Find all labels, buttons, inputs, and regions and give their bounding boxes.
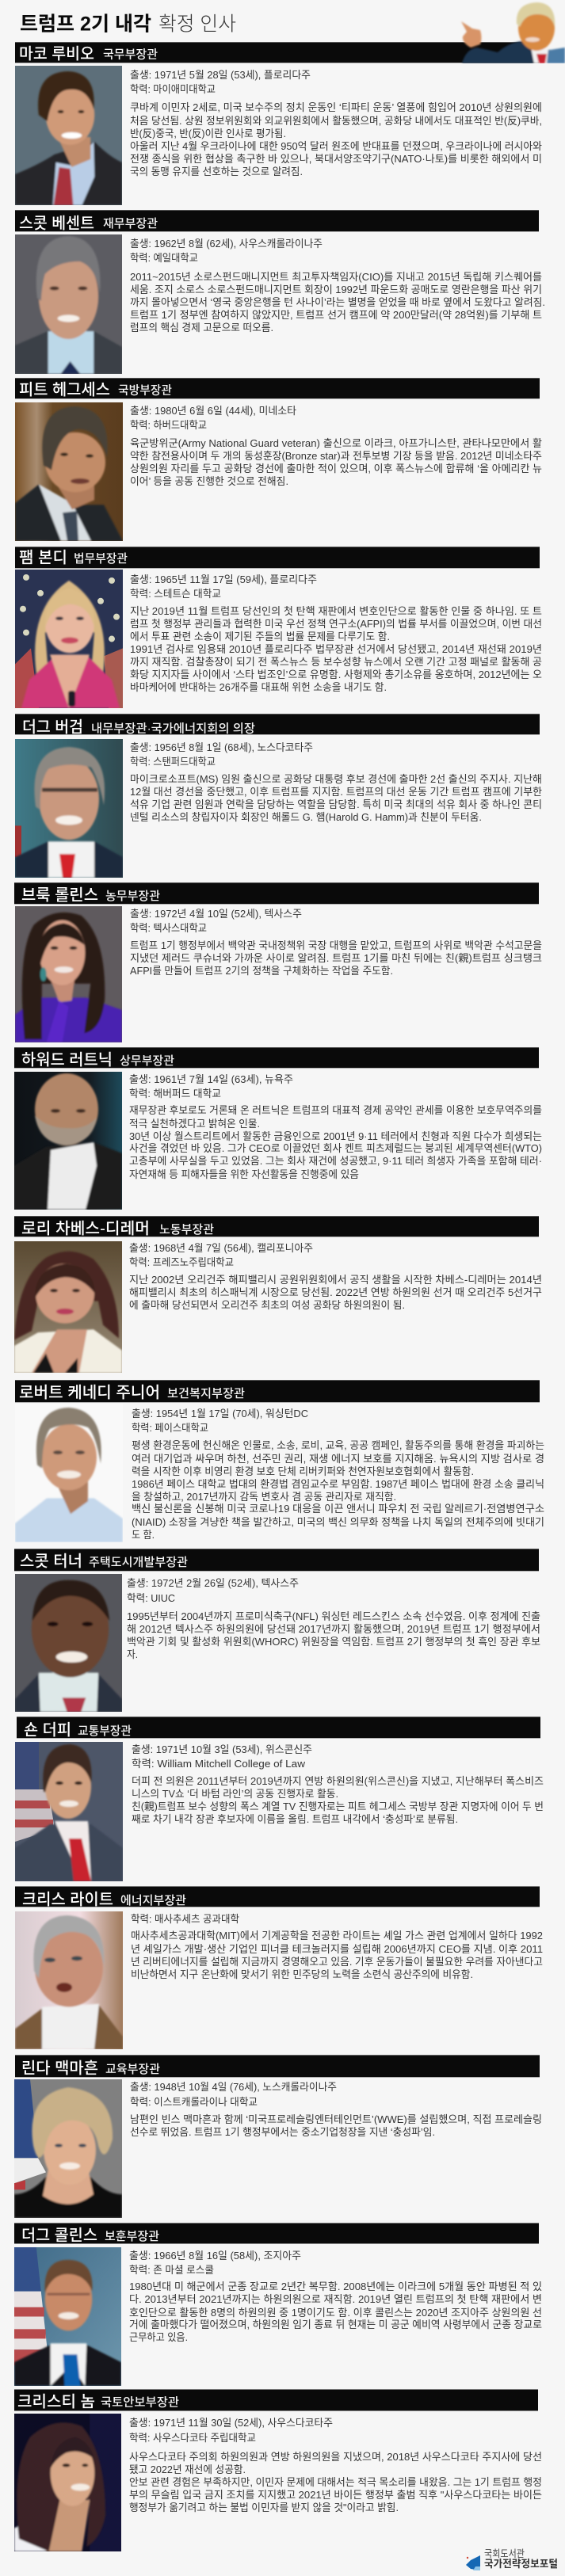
profile text: 하워드 러트닉: 출생: 1961년 7월 14일 (63세), 뉴욕주	[129, 1073, 293, 1085]
profile text: 스콧 베센트: 학력: 예일대학교	[130, 252, 198, 264]
header: 로버트 케네디 주니어 보건복지부장관: 보건복지부장관	[167, 1387, 245, 1400]
header: 더그 콜린스 보훈부장관	[14, 2223, 539, 2245]
profile text: 팸 본디: 에서 투표 관련 소송이 제기된 주들의 법률 문제를 다루기도 함.	[130, 631, 390, 642]
header: 마코 루비오 국무부장관: 국무부장관	[103, 48, 158, 62]
profile text: 더그 버검: 마이크로소프트(MS) 임원 출신으로 공화당 대통령 후보 경선에 출마한 2선 출신의 주지사. 지난해	[130, 773, 542, 785]
panel: 크리스 라이트	[15, 1886, 543, 2049]
profile text: 스콧 베센트: 까지 몰아넣으면서 ‘영국 중앙은행을 턴 사나이’라는 별명을 얻었을 때 바로 옆에서 도왔다고 알려짐.	[130, 296, 545, 308]
profile text: 피트 헤그세스: 이어’ 등을 공동 진행한 것으로 전해짐.	[130, 475, 288, 487]
photo: 팸 본디	[15, 570, 123, 708]
header: 브룩 롤린스 농무부장관: 농무부장관	[105, 890, 160, 903]
profile text: 더그 버검: 넨털 리소스의 창립자이자 회장인 해롤드 G. 햄(Harold G. Hamm)과 친분이 두터움.	[130, 811, 482, 823]
header: 스콧 터너 주택도시개발부장관: 주택도시개발부장관	[89, 1556, 188, 1569]
header: 크리스티 놈 국토안보부장관	[14, 2389, 538, 2411]
profile text: 로버트 케네디 주니어: 1986년 페이스 대학교 법대의 환경법 겸임교수로 부임함. 1987년 페이스 법대에 환경 소송 클리닉	[132, 1478, 544, 1490]
panel: 스콧 베센트	[15, 210, 545, 374]
header: 피트 헤그세스 국방부장관: 국방부장관	[118, 383, 172, 398]
profile text: 로리 차베스-디레머	[129, 1242, 542, 1311]
panel: 숀 더피	[15, 1717, 544, 1881]
profile text: 크리스티 놈: 행정부가 옮기려고 하는 불법 이민자를 받지 않을 것"이라고 밝힘.	[129, 2502, 399, 2513]
panel: 로버트 케네디 주니어	[15, 1380, 544, 1542]
profile text: 로리 차베스-디레머: 출생: 1968년 4월 7일 (56세), 캘리포니아주	[129, 1242, 313, 1254]
profile text: 스콧 베센트: 세움. 조지 소로스 소로스펀드매니지먼트 회장이 1992년 파운드화 공매도로 영란은행을 파산 위기	[130, 284, 542, 295]
profile text: 크리스 라이트: 년 셰일가스 개발·생산 기업인 피너클 테크놀러지를 설립해 2006년까지 CEO를 지냄. 이후 2011	[131, 1943, 543, 1955]
profile text: 로리 차베스-디레머: 학력: 프레즈노주립대학교	[129, 1256, 234, 1268]
header: 로리 차베스-디레머 노동부장관: 로리 차베스-디레머	[21, 1220, 150, 1237]
profile text: 로리 차베스-디레머: 에 출마해 당선되면서 오리건주 최초의 여성 공화당 하원의원이 됨.	[129, 1299, 405, 1311]
header: 숀 더피 교통부장관	[17, 1717, 540, 1740]
photo: 브룩 롤린스	[15, 906, 122, 1042]
profile text: 더그 콜린스: 학력: 존 마셜 로스쿨	[129, 2264, 214, 2276]
panel: 팸 본디	[15, 547, 542, 708]
header: 크리스티 놈 국토안보부장관: 국토안보부장관	[101, 2395, 179, 2410]
header: 더그 버검 내무부장관·국가에너지회의 의장: 내무부장관·국가에너지회의 의장	[91, 722, 255, 736]
profile text: 브룩 롤린스: AFPI를 만들어 트럼프 2기의 정책을 구체화하는 작업을 주도함.	[130, 965, 393, 977]
profile text: 스콧 베센트: 2011~2015년 소로스펀드매니지먼트 최고투자책임자(CIO)를 지내고 2015년 독립해 키스퀘어를	[130, 271, 542, 283]
profile text: 팸 본디: 학력: 스테트슨 대학교	[130, 588, 221, 600]
logo: 국회도서관 국가전략정보포털	[466, 2548, 558, 2570]
profile text: 로리 차베스-디레머: 해피밸리시 최초의 히스패닉계 시장으로 당선됨. 2022년 연방 하원의원 선거 때 오리건주 5선거구	[129, 1286, 542, 1298]
profile text: 하워드 러트닉	[129, 1073, 542, 1180]
profile text: 마코 루비오	[130, 69, 542, 177]
photo: 크리스티 놈	[14, 2414, 121, 2551]
header: 스콧 베센트 재무부장관	[15, 210, 539, 233]
photo: 더그 콜린스	[14, 2247, 121, 2386]
profile text: 팸 본디: 까지 재직함. 검찰총장이 되기 전 폭스뉴스 등 보수성향 뉴스에서 오랜 기간 고정 패널로 활동해 공	[130, 656, 542, 668]
header: 스콧 터너 주택도시개발부장관: 스콧 터너	[20, 1553, 82, 1570]
profile text: 피트 헤그세스: 출생: 1980년 6월 6일 (44세), 미네소타	[130, 405, 296, 417]
profile text: 스콧 터너: 출생: 1972년 2월 26일 (52세), 텍사스주	[127, 1577, 299, 1589]
profile text: 하워드 러트닉: 자연재해 등 피해자들을 위한 자선활동을 진행중에 있음	[129, 1168, 359, 1180]
profile text: 더그 콜린스: 거에 출마했다가 떨어졌으며, 하원의원 임기 종료 뒤 현재는 미 공군 예비역 사령부에서 군종 장교로	[129, 2319, 542, 2330]
profile text: 더그 콜린스: 다. 2013년부터 2021년까지는 하원의원으로 재직함. 2019년 열린 트럼프의 첫 탄핵 재판에서 변	[129, 2293, 542, 2305]
photo: 크리스 라이트	[15, 1911, 123, 2049]
profile text: 크리스티 놈: 사우스다코타 주의회 하원의원과 연방 하원의원을 지냈으며, 2018년 사우스다코타 주지사에 당선	[129, 2451, 542, 2463]
profile text: 마코 루비오: 전쟁 종식을 위한 협상을 촉구한 바 있으나, 북대서양조약기구(NATO·나토)를 비롯한 해외에서 미	[130, 153, 542, 165]
panel: 린다 맥마흔	[14, 2055, 542, 2218]
header: 스콧 베센트 재무부장관: 재무부장관	[103, 217, 158, 231]
header: 스콧 베센트 재무부장관: 스콧 베센트	[19, 214, 94, 233]
profile text: 스콧 터너: 해 2012년 텍사스주 하원의원에 당선돼 2017년까지 활동했으며, 2019년 트럼프 1기 행정부에서	[127, 1623, 540, 1635]
profile text: 로리 차베스-디레머: 지난 2002년 오리건주 해피밸리시 공원위원회에서 공직 생활을 시작한 차베스-디레머는 2014년	[129, 1274, 542, 1286]
profile text: 로버트 케네디 주니어: 평생 환경운동에 헌신해온 인물로, 소송, 로비, 교육, 공공 캠페인, 활동주의를 통해 환경을 파괴하는	[132, 1439, 544, 1451]
header: 린다 맥마흔 교육부장관: 린다 맥마흔	[21, 2060, 98, 2077]
profile text: 크리스 라이트: 매사추세츠공과대학(MIT)에서 기계공학을 전공한 라이트는 셰일 가스 관련 업계에서 일하다 1992	[131, 1930, 543, 1942]
profile text: 숀 더피: 출생: 1971년 10월 3일 (53세), 위스콘신주	[132, 1743, 312, 1755]
profile text: 로버트 케네디 주니어: 도 함.	[132, 1529, 155, 1541]
profile text: 브룩 롤린스: 출생: 1972년 4월 10일 (52세), 텍사스주	[130, 908, 302, 920]
header: 브룩 롤린스 농무부장관: 브룩 롤린스	[21, 886, 98, 905]
profile text: 숀 더피: 째로 차기 내각 장관 후보자에 이름을 올림. 트럼프 내각에서 ‘충성파’로 분류됨.	[132, 1813, 458, 1825]
profile text: 크리스 라이트: 학력: 매사추세츠 공과대학	[131, 1913, 239, 1925]
profile text: 더그 콜린스: 호인단으로 활동한 8명의 하원의원 중 1명이기도 함. 이후 콜린스는 2020년 조지아주 상원의원 선	[129, 2307, 542, 2319]
panel: 더그 콜린스	[14, 2223, 542, 2386]
profile text: 크리스티 놈: 됐고 2022년 재선에 성공함.	[129, 2464, 246, 2475]
profile text: 더그 버검: 학력: 스탠퍼드대학교	[130, 756, 216, 768]
header: 팸 본디 법무부장관: 팸 본디	[19, 548, 67, 567]
header: 크리스 라이트 에너지부장관: 크리스 라이트	[22, 1890, 113, 1909]
profile text: 스콧 터너: 백악관 기회 및 활성화 위원회(WHORC) 위원장을 역임함. 트럼프 2기 행정부의 첫 흑인 장관 후보	[127, 1636, 540, 1648]
profile text: 더그 버검: 12월 대선 경선을 중단했고, 이후 트럼프를 지지함. 트럼프의 대선 운동 기간 트럼프 캠프에 기부한	[130, 786, 542, 798]
header: 로리 차베스-디레머 노동부장관: 노동부장관	[159, 1223, 214, 1237]
header: 피트 헤그세스 국방부장관: 피트 헤그세스	[19, 380, 110, 399]
header: 린다 맥마흔 교육부장관: 교육부장관	[105, 2063, 160, 2076]
profile text: 더그 버검: 출생: 1956년 8월 1일 (68세), 노스다코타주	[130, 741, 313, 753]
header: 브룩 롤린스 농무부장관	[14, 882, 539, 905]
profile text: 마코 루비오: 처음 당선됨. 상원 정보위원회와 외교위원회에서 활동했으며, 공화당 내에서도 대표적인 반(反)쿠바,	[130, 115, 542, 127]
profile text: 하워드 러트닉: 학력: 해버퍼드 대학교	[129, 1088, 221, 1099]
panel: 피트 헤그세스	[15, 378, 542, 541]
profile text: 크리스티 놈: 부의 무슬림 입국 금지 조치를 지지했고 2021년 바이든 행정부 출범 직후 "사우스다코타는 바이든	[129, 2489, 542, 2501]
photo: 린다 맥마흔	[14, 2079, 122, 2218]
profile text: 로버트 케네디 주니어: 력을 시작한 이후 비영리 환경 보호 단체 리버키퍼와 천연자원보호협회에서 활동함.	[132, 1465, 474, 1477]
profile text: 피트 헤그세스: 학력: 하버드대학교	[130, 419, 207, 431]
logo: 국회도서관 국가전략정보포털: 국회도서관	[484, 2548, 525, 2559]
title: 트럼프 2기 내각	[20, 13, 151, 35]
profile text: 스콧 베센트: 럼프의 핵심 경제 고문으로 떠오름.	[130, 322, 273, 333]
header: 숀 더피 교통부장관: 교통부장관	[78, 1724, 132, 1738]
title: 확정 인사	[158, 13, 236, 35]
panel: 스콧 터너	[14, 1549, 540, 1712]
profile text: 숀 더피: 니스의 TV쇼 ‘더 바텀 라인’의 공동 진행자로 활동.	[132, 1788, 338, 1800]
profile text: 스콧 터너: 1995년부터 2004년까지 프로미식축구(NFL) 워싱턴 레드스킨스 소속 선수였음. 이후 정계에 진출	[127, 1610, 540, 1622]
profile text: 크리스 라이트: 비난하면서 지구 온난화에 맞서기 위한 민주당의 노력을 소련식 공산주의에 비유함.	[131, 1968, 473, 1980]
profile text: 숀 더피: 더피 전 의원은 2011년부터 2019년까지 연방 하원의원(위스콘신)을 지냈고, 지난해부터 폭스비즈	[132, 1775, 544, 1787]
header: 팸 본디 법무부장관	[15, 547, 540, 569]
profile text: 로버트 케네디 주니어: 학력: 페이스대학교	[132, 1422, 208, 1434]
header: 린다 맥마흔 교육부장관	[15, 2055, 540, 2078]
profile text: 스콧 베센트	[130, 238, 545, 333]
profile text: 린다 맥마흔: 출생: 1948년 10월 4일 (76세), 노스캐롤라이나주	[130, 2081, 337, 2093]
photo: 로리 차베스-디레머	[14, 1241, 122, 1373]
profile text: 하워드 러트닉: 고층부에 사무실을 두고 있었음. 그는 회사 재건에 성공했고, 9·11 테러 희생자 가족을 포함해 테러·	[129, 1155, 542, 1167]
profile text: 린다 맥마흔: 선수로 뛰었음. 트럼프 1기 행정부에서는 중소기업청장을 지낸 ‘충성파’임.	[130, 2126, 435, 2138]
profile text: 숀 더피	[132, 1743, 544, 1825]
panel: 로리 차베스-디레머	[14, 1216, 542, 1373]
panel: 하워드 러트닉	[14, 1047, 542, 1210]
profile text: 브룩 롤린스: 지냈던 제러드 쿠슈너와 가까운 사이로 알려짐. 트럼프 1기를 마친 뒤에는 친(親)트럼프 싱크탱크	[130, 952, 542, 964]
header: 스콧 터너 주택도시개발부장관	[14, 1549, 539, 1572]
profile text: 로버트 케네디 주니어: 출생: 1954년 1월 17일 (70세), 워싱턴DC	[132, 1408, 308, 1419]
header: 하워드 러트닉 상무부장관: 상무부장관	[120, 1054, 174, 1068]
profile text: 팸 본디: 럼프 첫 행정부 관리들과 협력한 미국 우선 정책 연구소(AFPI)의 법률 부서를 이끌었으며, 이번 대선	[130, 618, 542, 630]
header: 더그 버검 내무부장관·국가에너지회의 의장	[15, 714, 540, 737]
photo: 하워드 러트닉	[14, 1072, 122, 1210]
profile text: 크리스티 놈: 출생: 1971년 11월 30일 (52세), 사우스다코타주	[129, 2417, 333, 2429]
profile text: 크리스 라이트	[131, 1913, 543, 1980]
profile text: 린다 맥마흔: 학력: 이스트캐롤라이나 대학교	[130, 2096, 258, 2108]
header: 크리스티 놈 국토안보부장관: 크리스티 놈	[17, 2392, 95, 2411]
profile text: 팸 본디: 바마케어에 반대하는 26개주를 대표해 위헌 소송을 내기도 함.	[130, 681, 387, 693]
profile text: 크리스티 놈: 학력: 사우스다코타 주립대학교	[129, 2432, 256, 2444]
profile text: 하워드 러트닉: 재무장관 후보로도 거론돼 온 러트닉은 트럼프의 대표적 경제 공약인 관세를 이용한 보호무역주의를	[129, 1104, 542, 1116]
profile text: 팸 본디: 1991년 검사로 임용돼 2010년 플로리다주 법무장관 선거에서 당선됐고, 2014년 재선돼 2019년	[130, 643, 542, 655]
profile text: 피트 헤그세스	[130, 405, 542, 487]
profile text: 더그 콜린스	[129, 2250, 542, 2343]
profile text: 피트 헤그세스: 육군방위군(Army National Guard veteran) 출신으로 이라크, 아프가니스탄, 관타나모만에서 활	[130, 437, 542, 449]
profile text: 로버트 케네디 주니어: 여러 대기업과 싸우며 하천, 선주민 권리, 재생 에너지 보호를 지지해옴. 뉴욕시의 지방 검사로 경	[132, 1453, 544, 1465]
photo: 숀 더피	[15, 1742, 123, 1881]
header: 더그 콜린스 보훈부장관: 보훈부장관	[105, 2230, 159, 2243]
profile text: 스콧 터너: 자.	[127, 1648, 138, 1660]
header: 로버트 케네디 주니어 보건복지부장관	[15, 1380, 540, 1403]
header: 더그 콜린스 보훈부장관: 더그 콜린스	[21, 2226, 97, 2245]
profile text: 스콧 베센트: 출생: 1962년 8월 (62세), 사우스캐롤라이나주	[130, 238, 323, 250]
profile text: 린다 맥마흔: 남편인 빈스 맥마흔과 함께 ‘미국프로레슬링엔터테인먼트’(WWE)를 설립했으며, 직접 프로레슬링	[130, 2113, 542, 2125]
header: 더그 버검 내무부장관·국가에너지회의 의장: 더그 버검	[22, 718, 83, 737]
profile text: 마코 루비오: 출생: 1971년 5월 28일 (53세), 플로리다주	[130, 69, 311, 81]
header: 크리스 라이트 에너지부장관	[15, 1886, 540, 1909]
header: 하워드 러트닉 상무부장관	[14, 1047, 539, 1069]
profile text: 더그 콜린스: 1980년대 미 해군에서 군종 장교로 2년간 복무함. 2008년에는 이라크에 5개월 동안 파병된 적 있	[129, 2281, 542, 2292]
header: 로리 차베스-디레머 노동부장관	[14, 1216, 539, 1237]
title	[20, 13, 236, 35]
profile text: 브룩 롤린스: 학력: 텍사스대학교	[130, 922, 207, 934]
profile text: 린다 맥마흔	[130, 2081, 542, 2138]
profile text: 더그 버검	[130, 741, 542, 823]
panel: 크리스티 놈	[14, 2389, 542, 2551]
photo: 더그 버검	[15, 739, 123, 878]
profile text: 브룩 롤린스: 트럼프 1기 행정부에서 백악관 국내정책위 국장 대행을 맡았고, 트럼프의 사위로 백악관 수석고문을	[130, 939, 542, 951]
header: 하워드 러트닉 상무부장관: 하워드 러트닉	[21, 1050, 113, 1069]
profile text: 스콧 터너: 학력: UIUC	[127, 1592, 175, 1604]
profile text: 브룩 롤린스	[130, 908, 542, 977]
profile text: 팸 본디: 출생: 1965년 11월 17일 (59세), 플로리다주	[130, 574, 317, 585]
profile text: 마코 루비오: 아울러 지난 4월 우크라이나에 대한 950억 달러 원조에 반대표를 던졌으며, 우크라이나에 러시아와	[130, 140, 542, 152]
profile text: 하워드 러트닉: 사건을 겪었던 바 있음. 그가 CEO로 이끌었던 회사 켄트 피츠제럴드는 붕괴된 세계무역센터(WTO)	[129, 1142, 542, 1154]
profile text: 팸 본디: 화당 지지자들 사이에서 ‘스타 법조인’으로 유명함. 사형제와 총기소유를 옹호하며, 2012년에는 오	[130, 669, 542, 680]
photo: 피트 헤그세스	[15, 402, 123, 541]
profile text: 크리스 라이트: 년 리버티에너지를 설립해 지금까지 경영해오고 있음. 기후 운동가들이 불필요한 우려를 자아낸다고	[131, 1956, 543, 1968]
icon: 트럼프 pointing figure	[461, 2, 565, 63]
photo: 로버트 케네디 주니어	[15, 1407, 123, 1542]
header: 숀 더피 교통부장관: 숀 더피	[24, 1721, 71, 1740]
profile text: 숀 더피: 학력: William Mitchell College of Law	[132, 1758, 306, 1770]
panel: 마코 루비오	[15, 42, 542, 205]
profile text: 스콧 터너	[127, 1577, 540, 1660]
profile text: 더그 콜린스: 근무하고 있음.	[129, 2331, 188, 2343]
header: 팸 본디 법무부장관: 법무부장관	[74, 552, 128, 566]
profile text: 더그 콜린스: 출생: 1966년 8월 16일 (58세), 조지아주	[129, 2250, 301, 2262]
profile text: 로버트 케네디 주니어: (NIAID) 소장을 겨냥한 책을 발간하고, 미국의 백신 의무화 정책을 나치 독일의 전체주의에 빗대기	[132, 1516, 544, 1528]
profile text: 하워드 러트닉: 적극 실천하겠다고 밝혀온 인물.	[129, 1118, 260, 1130]
profile text: 피트 헤그세스: 상원의원 자리를 두고 공화당 경선에 출마한 적이 있으며, 이후 폭스뉴스에 합류해 ‘올 아메리칸 뉴	[130, 463, 542, 474]
profile text: 팸 본디: 지난 2019년 11월 트럼프 당선인의 첫 탄핵 재판에서 변호인단으로 활동한 인물 중 하나임. 또 트	[130, 605, 542, 617]
header: 마코 루비오 국무부장관	[15, 42, 539, 63]
profile text: 크리스티 놈: 안보 관련 경험은 부족하지만, 이민자 문제에 대해서는 적극 목소리를 내왔음. 그는 1기 트럼프 행정	[129, 2476, 542, 2488]
profile text: 로버트 케네디 주니어	[132, 1408, 544, 1541]
profile text: 하워드 러트닉: 30년 이상 월스트리트에서 활동한 금융인으로 2001년 9·11 테러에서 친형과 직원 다수가 희생되는	[129, 1130, 542, 1142]
profile text: 크리스티 놈	[129, 2417, 542, 2513]
profile text: 로버트 케네디 주니어: 백신 불신론을 신봉해 미국 코로나19 대응을 이끈 앤서니 파우치 전 국립 알레르기·전염병연구소	[132, 1503, 544, 1515]
profile text: 스콧 베센트: 트럼프 1기 정부엔 참여하지 않았지만, 트럼프 선거 캠프에 약 200만달러(약 28억원)를 기부해 트	[130, 309, 542, 321]
profile text: 더그 버검: 석유 기업 관련 임원과 연락을 담당하는 역할을 담당함. 특히 미국 최대의 석유 회사 중 하나인 콘티	[130, 798, 542, 810]
header: 피트 헤그세스 국방부장관	[15, 378, 540, 399]
profile text: 숀 더피: 친(親)트럼프 보수 성향의 폭스 계열 TV 진행자로는 피트 헤그세스 국방부 장관 지명자에 이어 두 번	[132, 1801, 544, 1812]
profile text: 피트 헤그세스: 약한 참전용사이며 두 개의 동성훈장(Bronze star)과 전투보병 기장 등을 받음. 2012년 미네소타주	[130, 450, 542, 462]
photo: 스콧 베센트	[15, 234, 122, 374]
profile text: 마코 루비오: 국의 동맹 유지를 선호하는 것으로 알려짐.	[130, 166, 303, 177]
photo: 스콧 터너	[15, 1574, 122, 1712]
profile text: 마코 루비오: 학력: 마이애미대학교	[130, 83, 216, 95]
logo: 국회도서관 국가전략정보포털: 국가전략정보포털	[484, 2558, 558, 2570]
header: 로버트 케네디 주니어 보건복지부장관: 로버트 케네디 주니어	[19, 1383, 160, 1402]
profile text: 로버트 케네디 주니어: 을 창설하고, 2017년까지 감독 변호사 겸 공동 관리자로 재직함.	[132, 1491, 396, 1503]
header: 마코 루비오 국무부장관: 마코 루비오	[19, 44, 94, 63]
profile text: 마코 루비오: 쿠바계 이민자 2세로, 미국 보수주의 정치 운동인 ‘티파티 운동’ 열풍에 힘입어 2010년 상원의원에	[130, 101, 542, 113]
photo: 마코 루비오	[15, 66, 122, 205]
header: 크리스 라이트 에너지부장관: 에너지부장관	[120, 1894, 186, 1907]
profile text: 팸 본디	[130, 574, 542, 693]
panel: 브룩 롤린스	[14, 882, 542, 1042]
panel: 더그 버검	[15, 714, 542, 878]
profile text: 마코 루비오: 반(反)중국, 반(反)이란 인사로 평가됨.	[130, 128, 286, 139]
